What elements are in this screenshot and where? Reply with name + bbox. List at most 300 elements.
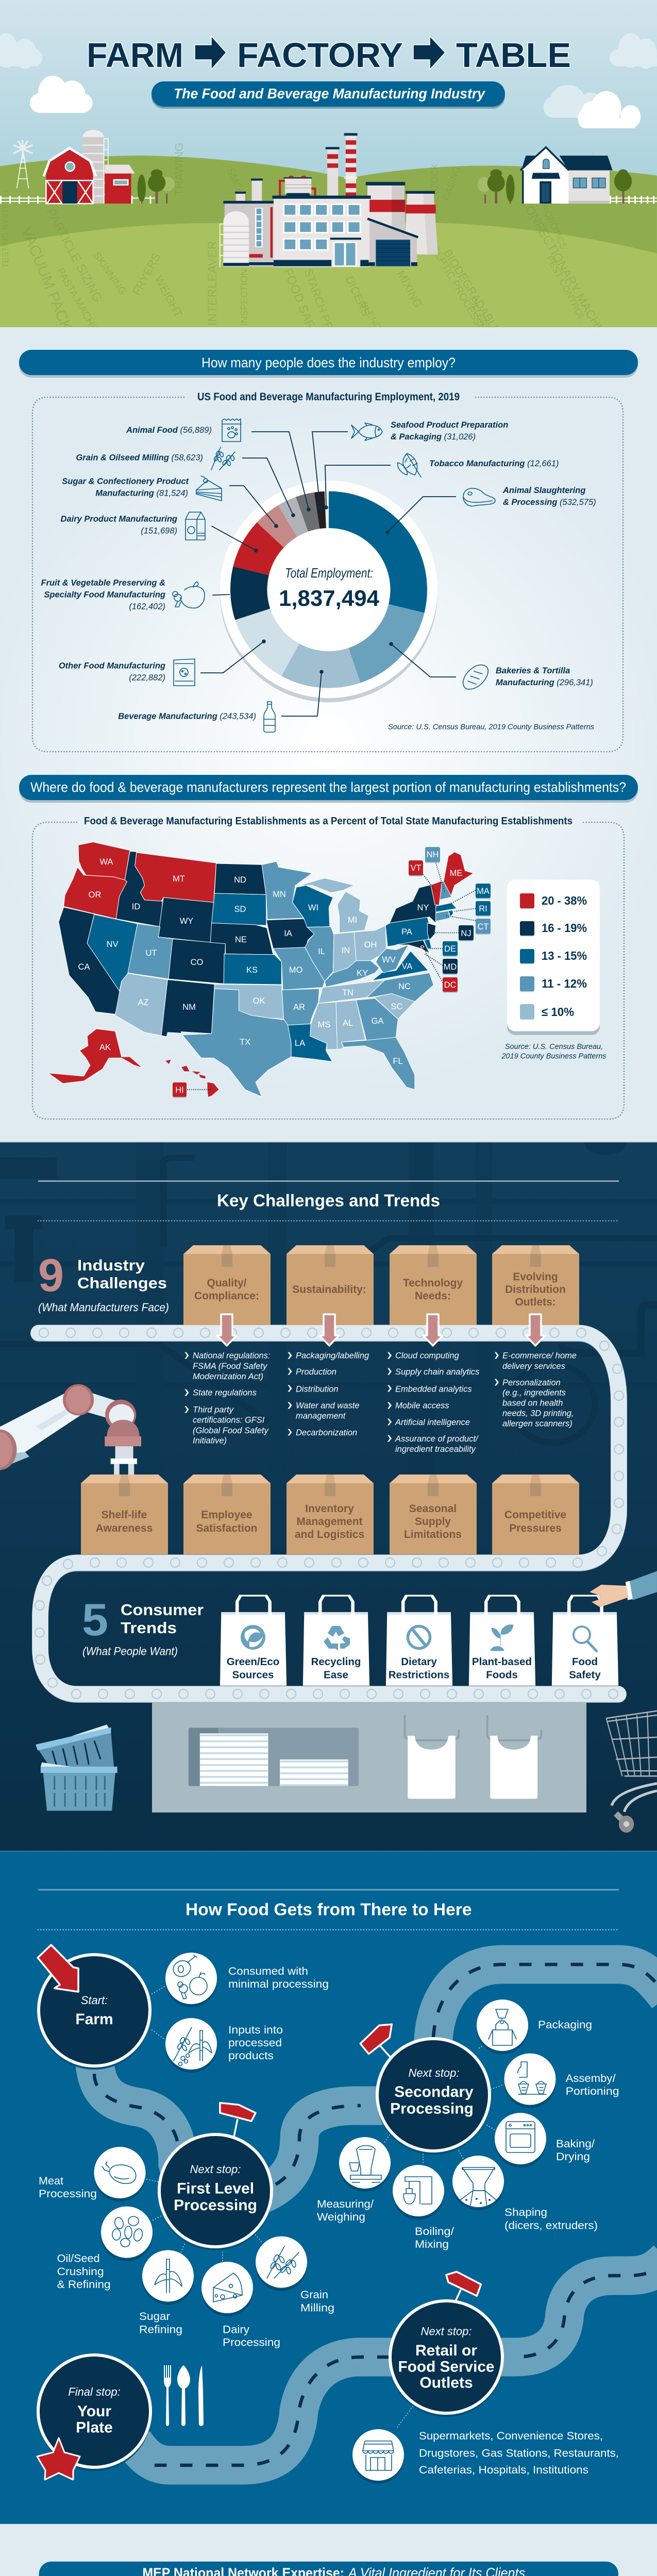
icon: snack bag: [174, 659, 195, 686]
box: technology needs: Technology: [403, 1277, 463, 1289]
item: dairy processing: Dairy: [223, 2324, 249, 2336]
box: employee satisfaction: Satisfaction: [196, 1522, 258, 1534]
shopping bags: [220, 1596, 618, 1686]
food industry word cloud texture: PASTA MACHINES: [55, 266, 109, 349]
subtitle pill: The Food and Beverage Manufacturing Industry: [174, 86, 485, 101]
box: distribution outlets: Outlets:: [515, 1296, 556, 1308]
state abbreviations: NE: [235, 935, 247, 944]
food industry word cloud texture: PEST CONTROL: [544, 253, 587, 322]
food industry word cloud texture: SKINNING: [91, 250, 128, 297]
bag: green eco sources: [227, 1625, 279, 1681]
title: FARM: [87, 36, 183, 75]
donut chart: [220, 481, 437, 702]
item: measuring and weighing: Measuring/: [317, 2198, 374, 2210]
stop: secondary processing: Processing: [390, 2100, 474, 2117]
item: baking and drying: Baking/: [556, 2138, 595, 2150]
item: baking and drying: [506, 2122, 595, 2163]
state abbreviations: ND: [234, 875, 246, 885]
stop: retail or food service outlets: Food Service: [398, 2359, 495, 2376]
item: consumed with minimal processing: [171, 1955, 329, 1999]
list: quality and compliance: (Global Food Safety: [193, 1426, 269, 1435]
small state tags: NH: [427, 850, 439, 859]
item: shaping: [460, 2167, 598, 2232]
item: oil seed crushing: Oil/Seed: [57, 2252, 100, 2265]
list: quality and compliance: State regulations: [193, 1388, 257, 1398]
stop: first level processing: First Level: [177, 2180, 254, 2197]
small state tags: DE: [444, 944, 456, 954]
list: sustainability: [288, 1351, 369, 1437]
food industry word cloud texture: CONFECTIONARY MACHINES: [518, 196, 617, 354]
list: technology needs: Artificial intelligence: [395, 1418, 470, 1427]
food industry word cloud texture: SMOKING: [224, 166, 255, 215]
item: meat processing: Meat: [39, 2175, 63, 2187]
item: oil seed crushing: [57, 2216, 144, 2291]
heading: 5 consumer trends: Consumer: [121, 1601, 204, 1619]
bag: dietary restrictions: Dietary: [401, 1656, 437, 1668]
state abbreviations: NM: [182, 1003, 196, 1012]
state abbreviations: OK: [253, 996, 265, 1006]
list: technology needs: Mobile access: [395, 1401, 449, 1411]
box: inventory management: Inventory: [305, 1503, 354, 1515]
food industry word cloud texture: PARTICLE SIZING: [44, 206, 105, 304]
state abbreviations: CA: [78, 962, 90, 972]
signpost: first level processing: [220, 2103, 256, 2158]
label: beverage: Beverage Manufacturing (243,534): [118, 712, 256, 721]
item: consumed with minimal processing: Consumed with: [228, 1965, 308, 1977]
panel: MEP national network expertise: [0, 2524, 657, 2576]
item: sugar refining: Sugar: [139, 2310, 170, 2323]
label: animal slaughtering: [502, 486, 596, 507]
item: packaging: Packaging: [538, 2019, 592, 2031]
label: fruit and vegetable: [41, 578, 165, 611]
state abbreviations: NV: [107, 940, 118, 949]
icon: milk carton: [186, 512, 205, 540]
map legend: 13 - 15%: [542, 949, 587, 962]
state abbreviations: WI: [308, 903, 318, 912]
state abbreviations: PA: [401, 927, 412, 937]
item: oil seed crushing: & Refining: [57, 2278, 111, 2291]
list: distribution outlets: allergen scanners): [502, 1419, 572, 1428]
list: sustainability: Production: [296, 1367, 336, 1377]
list: distribution outlets: [495, 1351, 577, 1428]
illustration: shopping cart: [607, 1711, 657, 1812]
label: tobacco: Tobacco Manufacturing (12,661): [429, 459, 559, 468]
map legend: [507, 880, 600, 1035]
state abbreviations: MN: [273, 890, 286, 899]
stop: secondary processing: [376, 2039, 491, 2155]
map legend: 11 - 12%: [542, 977, 587, 990]
food industry word cloud texture: STARCH PROCESSING: [301, 267, 356, 388]
state abbreviations: FL: [393, 1057, 403, 1066]
list: technology needs: ingredient traceability: [395, 1445, 477, 1454]
bag: plant-based foods: [472, 1625, 532, 1681]
item: consumed with minimal processing: minimal processing: [228, 1978, 329, 1990]
stacks of bags on table: [189, 1715, 542, 1799]
list: sustainability: Water and waste: [296, 1401, 360, 1411]
item: boiling and mixing: [403, 2177, 454, 2250]
label: dairy: [61, 514, 177, 535]
item: inputs into processed products: [174, 2024, 283, 2066]
label: bakeries: [496, 666, 593, 687]
item: sugar refining: Refining: [139, 2324, 182, 2336]
state abbreviations: SC: [391, 1002, 403, 1011]
map source note: Source: U.S. Census Bureau,: [505, 1043, 603, 1051]
small state tags: MA: [477, 887, 490, 896]
item: shaping: Shaping: [504, 2206, 547, 2218]
state abbreviations: TX: [240, 1038, 250, 1047]
stop: first level processing: Next stop:: [190, 2163, 241, 2176]
item: retail store outlets: Drugstores, Gas Stations, Restaurants,: [419, 2447, 619, 2460]
list: technology needs: Cloud computing: [395, 1351, 460, 1361]
icon: red ribbon star: [37, 2438, 80, 2480]
label: other food: [59, 662, 165, 683]
icon: tobacco leaf: [398, 453, 421, 477]
bag: dietary restrictions: Restrictions: [389, 1669, 449, 1681]
state abbreviations: OR: [89, 890, 101, 900]
panel: state map: [32, 816, 624, 1119]
panel: employment and map background: [0, 327, 657, 1142]
state abbreviations: OH: [364, 940, 377, 950]
state abbreviations: AK: [99, 1043, 111, 1052]
chart heading: US Food and Beverage Manufacturing Employment, 2019: [197, 391, 460, 403]
list: distribution outlets: Personalization: [502, 1378, 561, 1387]
heading: where do manufacturers represent largest portion: [19, 775, 638, 803]
small state tags: VT: [410, 863, 422, 873]
food industry word cloud texture: BIODEGRADABLE PACKAGING: [441, 247, 540, 395]
box: sustainability: [287, 1245, 374, 1325]
stop: secondary processing: Next stop:: [408, 2066, 460, 2079]
state abbreviations: ID: [132, 902, 140, 911]
title: TABLE: [456, 36, 571, 75]
food industry word cloud texture: MIXING: [395, 268, 425, 310]
food industry word cloud texture: DICERS: [343, 274, 373, 318]
stop: your plate: Your: [77, 2403, 111, 2420]
label: bakeries: Manufacturing (296,341): [496, 678, 593, 687]
box: shelf-life awareness: Shelf-life: [102, 1509, 147, 1521]
small state tags: NJ: [461, 929, 471, 938]
heading: 9 industry challenges: (What Manufacturers Face): [38, 1301, 169, 1314]
list: sustainability: Packaging/labelling: [296, 1351, 369, 1361]
map legend: 20 - 38%: [542, 894, 587, 907]
food industry word cloud texture: ROBOTICS: [539, 202, 569, 251]
illustration: shopping baskets: [36, 1724, 117, 1811]
signpost: secondary processing: [360, 2024, 398, 2066]
map source note: [501, 1043, 607, 1060]
illustration: farm, barn and windmill: [0, 129, 175, 204]
bag: food safety: Food: [572, 1656, 598, 1668]
food industry word cloud texture: BLENDING: [359, 300, 392, 346]
list: quality and compliance: Third party: [193, 1405, 234, 1415]
state abbreviations: WY: [180, 917, 193, 926]
food industry word cloud texture: FILLERS: [467, 295, 492, 334]
illustration: house: [478, 147, 657, 204]
icon: bread: [463, 665, 488, 689]
bag: plant-based foods: Foods: [486, 1669, 518, 1681]
small state tags: HI: [175, 1086, 184, 1095]
small state tags: DC: [444, 980, 456, 990]
stop: farm: Start:: [81, 1994, 108, 2007]
box: employee satisfaction: [183, 1475, 271, 1554]
icon: apple and broccoli: [173, 582, 205, 608]
state abbreviations: CO: [191, 958, 204, 967]
label: seafood: Seafood Product Preparation: [391, 420, 508, 430]
box: competitive pressures: Pressures: [509, 1522, 562, 1534]
food industry word cloud texture: CASING: [441, 165, 462, 201]
item: measuring and weighing: Weighing: [317, 2211, 365, 2223]
state abbreviations: AZ: [138, 998, 149, 1007]
food industry word cloud texture: TESTING SYSTEMS: [2, 191, 10, 268]
item: dairy processing: Processing: [223, 2336, 280, 2348]
state abbreviations: AL: [343, 1019, 353, 1028]
icon: wheat: [211, 447, 235, 470]
source note: Source: U.S. Census Bureau, 2019 County Business Patterns: [388, 723, 594, 732]
item: packaging: [488, 2009, 592, 2045]
food industry word cloud texture: VACUUM PACKAGING: [18, 224, 94, 380]
list: quality and compliance: National regulations:: [193, 1351, 270, 1361]
list: quality and compliance: Initiative): [193, 1436, 227, 1445]
panel: employment donut chart: [32, 391, 623, 752]
label: animal slaughtering: Animal Slaughtering: [502, 486, 585, 495]
label: seafood: [391, 420, 508, 442]
label: animal slaughtering: & Processing (532,575): [503, 498, 596, 507]
bag: recycling ease: Recycling: [311, 1656, 361, 1668]
state abbreviations: GA: [372, 1016, 383, 1026]
dotted leaders for small states: [187, 863, 476, 1090]
heading: 5 consumer trends: (What People Want): [82, 1645, 178, 1658]
arrows from boxes to lists: [217, 1314, 545, 1346]
bag: green eco sources: Green/Eco: [227, 1656, 279, 1668]
box: technology needs: Needs:: [415, 1290, 451, 1302]
box: inventory management: and Logistics: [295, 1529, 364, 1540]
list: distribution outlets: based on health: [502, 1399, 563, 1408]
state abbreviations: [78, 857, 462, 1066]
food industry word cloud texture: INTERLEAVER: [206, 241, 220, 326]
subtitle pill: [151, 81, 505, 109]
list: sustainability: management: [296, 1412, 346, 1421]
item: baking and drying: Drying: [556, 2150, 590, 2163]
heading: 5 consumer trends: [82, 1594, 204, 1658]
white item circle shadows and discs: [94, 1953, 555, 2484]
heading pill: [39, 2562, 618, 2576]
box: quality and compliance: Quality/: [207, 1277, 247, 1289]
box: competitive pressures: [492, 1475, 579, 1554]
signpost: retail: [446, 2272, 481, 2315]
list: technology needs: Embedded analytics: [395, 1384, 472, 1394]
stop: your plate: [37, 2355, 151, 2480]
state abbreviations: MO: [289, 965, 302, 975]
state abbreviations: NY: [417, 903, 429, 912]
stop: farm: [38, 1945, 151, 2070]
state abbreviations: MI: [348, 916, 357, 925]
panel: key challenges and trends: [0, 1142, 657, 1851]
item: retail store outlets: [363, 2430, 619, 2476]
item: inputs into processed products: products: [228, 2049, 274, 2062]
stop: retail or food service outlets: Next stop:: [420, 2325, 472, 2338]
food industry word cloud texture: FRYERS: [130, 251, 163, 297]
box: quality and compliance: Compliance:: [194, 1290, 259, 1302]
list: distribution outlets: (e.g., ingredients: [502, 1388, 566, 1398]
leader lines: [200, 432, 456, 716]
label: dairy: (151,698): [141, 526, 177, 535]
conveyor belt: [35, 1328, 624, 1699]
stop: retail or food service outlets: [389, 2301, 503, 2417]
state abbreviations: LA: [295, 1039, 305, 1048]
sky background: [0, 0, 657, 177]
box: seasonal supply: Seasonal: [409, 1503, 457, 1515]
winding road: [94, 1964, 657, 2465]
label: dairy: Dairy Product Manufacturing: [61, 514, 177, 523]
small state tags: CT: [477, 922, 488, 931]
list: distribution outlets: needs, 3D printing,: [502, 1409, 574, 1418]
panel: hero: [0, 0, 657, 327]
stop: first level processing: [158, 2134, 273, 2250]
item: shaping: (dicers, extruders): [504, 2219, 598, 2232]
bag: food safety: [569, 1626, 601, 1681]
label: sugar and confectionery: Sugar & Confectionery Product: [62, 477, 189, 486]
state abbreviations: TN: [342, 988, 353, 997]
item: sugar refining: [139, 2259, 182, 2336]
heading: 5 consumer trends: 5: [82, 1594, 108, 1645]
icon: fish: [351, 423, 382, 440]
box: seasonal supply: [390, 1475, 477, 1554]
boxes: second row challenges: [81, 1475, 579, 1554]
small state tags: RI: [479, 904, 487, 913]
heading: 9 industry challenges: 9: [38, 1250, 64, 1301]
label: other food: Other Food Manufacturing: [59, 662, 165, 671]
box: seasonal supply: Limitations: [404, 1529, 462, 1540]
list: technology needs: Supply chain analytics: [395, 1367, 479, 1377]
list: quality and compliance: FSMA (Food Safety: [193, 1362, 268, 1371]
item: retail store outlets: Cafeterias, Hospitals, Institutions: [419, 2464, 588, 2476]
box: shelf-life awareness: Awareness: [96, 1522, 153, 1534]
item: inputs into processed products: Inputs into: [228, 2024, 283, 2036]
illustration: robot arm: [0, 1384, 141, 1478]
bag: dietary restrictions: [389, 1626, 449, 1681]
icon: cake slice: [196, 476, 222, 501]
box: sustainability: Sustainability:: [292, 1284, 366, 1295]
state abbreviations: WA: [100, 857, 113, 867]
list: distribution outlets: E-commerce/ home: [502, 1351, 577, 1361]
bag: food safety: Safety: [569, 1669, 601, 1681]
list: quality and compliance: Modernization Act): [193, 1372, 263, 1381]
state abbreviations: NC: [398, 982, 411, 991]
stop: retail or food service outlets: Retail or: [415, 2342, 477, 2359]
item: grain milling: Milling: [300, 2302, 334, 2314]
label: fruit and vegetable: Specialty Food Manufacturing: [44, 590, 165, 599]
box: competitive pressures: Competitive: [504, 1509, 566, 1521]
item: boiling and mixing: Mixing: [415, 2238, 449, 2250]
illustration: cart wheel: [616, 1814, 634, 1833]
icon: cutlery: [164, 2365, 204, 2426]
label: animal food: Animal Food (56,889): [126, 426, 212, 435]
label: other food: (222,882): [129, 673, 165, 683]
state abbreviations: MS: [318, 1020, 330, 1029]
food industry word cloud texture: FOOD SAFETY: [280, 266, 326, 352]
title: FACTORY: [237, 36, 403, 75]
stop: secondary processing: Secondary: [394, 2083, 474, 2100]
donut centre total: Total Employment:: [285, 565, 373, 581]
illustration: factory: [220, 133, 438, 267]
item: meat processing: [39, 2162, 136, 2200]
bag: recycling ease: [311, 1626, 361, 1681]
label: grain and oilseed milling: Grain & Oilseed Milling (58,623): [76, 453, 203, 463]
list: quality and compliance: certifications: GFSI: [193, 1416, 265, 1425]
food industry word cloud texture: INSPECTION: [239, 269, 249, 326]
heading: how many people: How many people does the industry employ?: [201, 355, 456, 370]
illustration: hand holding bag: [589, 1571, 657, 1607]
clouds: [0, 33, 657, 128]
heading rule: [38, 1180, 619, 1182]
state abbreviations: VA: [402, 962, 412, 971]
item: grain milling: [267, 2246, 334, 2314]
back hills and foreground field: [0, 156, 657, 330]
bag: green eco sources: Sources: [232, 1669, 274, 1681]
heading: 9 industry challenges: [38, 1250, 169, 1314]
stop: your plate: Plate: [76, 2419, 113, 2436]
item: assembly and portioning: Portioning: [566, 2085, 619, 2097]
list: technology needs: Assurance of product/: [395, 1434, 479, 1444]
donut centre total: [279, 565, 380, 611]
map legend: 16 - 19%: [542, 921, 587, 935]
state abbreviations: WV: [382, 955, 396, 964]
title: [87, 36, 571, 75]
box: inventory management: [287, 1475, 374, 1554]
map heading: Food & Beverage Manufacturing Establishments as a Percent of Total State Manufacturing Establishments: [84, 816, 572, 827]
item: measuring and weighing: [317, 2145, 381, 2223]
dotted rule: [38, 1220, 619, 1222]
box: inventory management: Management: [296, 1516, 363, 1528]
state abbreviations: AR: [293, 1003, 305, 1012]
stop: farm: Farm: [75, 2011, 113, 2028]
display table: [152, 1702, 586, 1812]
label: sugar and confectionery: Manufacturing (81,524): [95, 488, 188, 498]
stop: your plate: Final stop:: [68, 2385, 121, 2398]
list: technology needs: [388, 1351, 479, 1454]
heading: 9 industry challenges: Challenges: [77, 1275, 167, 1292]
small state tags: [173, 847, 491, 1098]
item: assembly and portioning: [518, 2062, 619, 2097]
state abbreviations: ME: [450, 869, 462, 878]
label: fruit and vegetable: (162,402): [129, 602, 165, 611]
item: grain milling: Grain: [300, 2289, 328, 2301]
label: bakeries: Bakeries & Tortilla: [496, 666, 570, 675]
item: assembly and portioning: Assemby/: [566, 2072, 616, 2084]
list: quality and compliance: [184, 1351, 270, 1445]
bag: plant-based foods: Plant-based: [472, 1656, 532, 1668]
heading: 5 consumer trends: Trends: [121, 1619, 177, 1637]
box: seasonal supply: Supply: [415, 1516, 451, 1528]
icon: steak: [463, 488, 495, 506]
heading rule: [38, 1889, 619, 1891]
state abbreviations: UT: [145, 948, 157, 958]
food industry word cloud texture: ASEPTIC PROCESSING: [426, 238, 493, 344]
food industry word cloud texture: WEIGHT: [153, 274, 185, 319]
section heading: Key Challenges and Trends: [217, 1191, 440, 1210]
label: fruit and vegetable: Fruit & Vegetable Preserving &: [41, 578, 165, 587]
factory pipe background: [0, 1143, 657, 1488]
map legend: ≤ 10%: [542, 1005, 574, 1019]
stop: retail or food service outlets: Outlets: [419, 2375, 473, 2392]
item: inputs into processed products: processed: [228, 2037, 282, 2049]
state abbreviations: IA: [284, 929, 292, 938]
food industry word cloud texture: [0, 131, 657, 327]
item: oil seed crushing: Crushing: [57, 2265, 104, 2278]
item: dairy processing: [213, 2273, 280, 2348]
state abbreviations: KS: [246, 965, 258, 975]
state abbreviations: MT: [173, 874, 185, 884]
heading: how many people: [19, 350, 638, 378]
box: distribution outlets: Evolving: [513, 1271, 558, 1283]
